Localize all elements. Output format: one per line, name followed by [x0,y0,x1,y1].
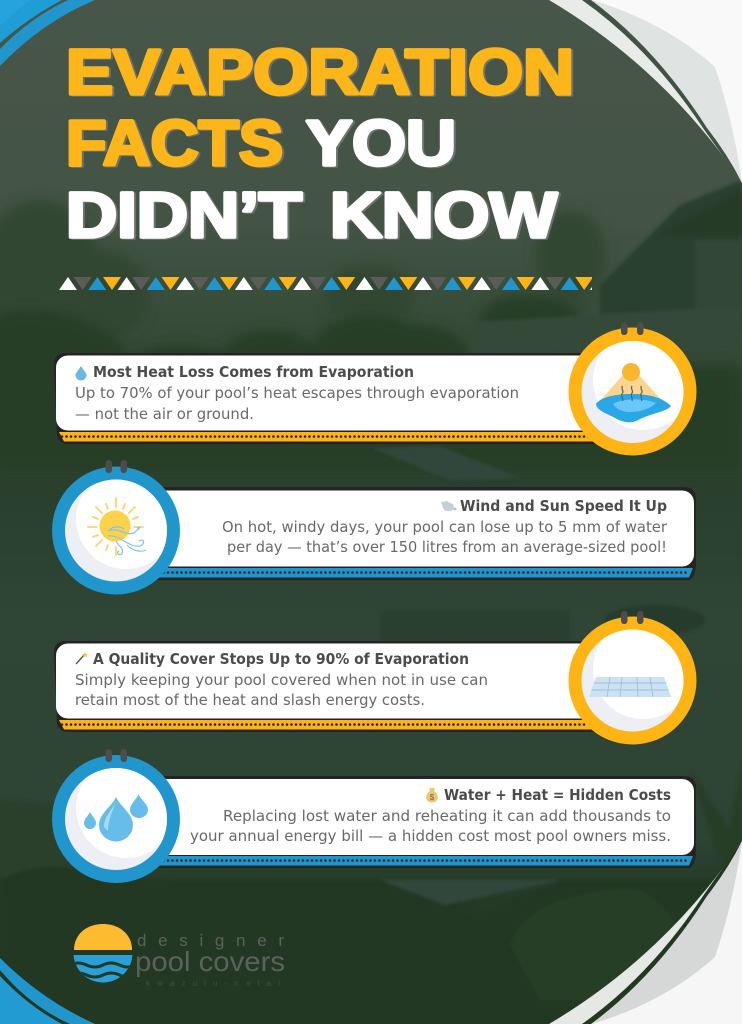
card base and dotted strip [130,776,696,868]
heading: A Quality Cover Stops Up to 90% of Evaporation [93,650,469,668]
body text: On hot, windy days, your pool can lose up to 5 mm of water [222,518,668,536]
corner decoration: top left [0,0,95,66]
panel: wind and sun [52,460,696,594]
logo wordmark: pool covers [135,946,285,977]
body text: Replacing lost water and reheating it can add thousands to [223,807,671,825]
icon badge: water drops [52,749,180,883]
card base and dotted strip [130,487,696,580]
title line: Didn't: DIDN’T [66,179,302,251]
title line: Know: KNOW [330,179,558,251]
logo mark: sun and waves [74,924,132,982]
icon badge: sun and wind [52,460,180,594]
body text: Up to 70% of your pool’s heat escapes through evaporation [75,384,519,402]
body text: Simply keeping your pool covered when not in use can [75,671,488,689]
icon: money bag [426,788,438,802]
card base and dotted strip [54,353,636,444]
body text: — not the air or ground. [75,405,254,423]
title [66,36,574,251]
body text [190,807,671,845]
triangle divider [59,277,608,290]
corner decoration: bottom left [0,958,95,1024]
icon: water drop [76,366,86,381]
heading: Wind and Sun Speed It Up [460,497,667,515]
card base and dotted strip [54,641,636,732]
panel: quality cover [54,611,696,744]
icon: money bag: $ [430,793,435,802]
icon: magic wand [76,652,88,664]
icon: wind puff [441,501,456,511]
corner decoration: top right [549,0,742,183]
heading: Most Heat Loss Comes from Evaporation [93,363,414,381]
body text: per day — that’s over 150 litres from an average-sized pool! [227,538,667,556]
body text: retain most of the heat and slash energy costs. [75,691,425,709]
panel: hidden costs [52,749,696,883]
title line: Facts: FACTS [66,107,283,179]
house roof and wall [472,180,742,352]
logo wordmark: kwazulu-natal [146,979,280,988]
logo wordmark: designer [137,931,284,950]
body text [222,518,668,556]
panel: most heat loss [54,322,696,456]
body text [75,384,519,423]
icon badge: pool cover [568,611,696,744]
title line: Evaporation: EVAPORATION [66,36,574,108]
logo [70,924,285,988]
heading: Water + Heat = Hidden Costs [444,786,671,804]
title line: You: YOU [306,107,456,179]
terrace and furniture [0,446,742,1024]
icon badge: sun over pool [568,322,696,456]
body text [75,671,488,709]
body text: your annual energy bill — a hidden cost most pool owners miss. [190,827,671,845]
logo wordmark [135,931,285,988]
corner decoration: bottom right [549,841,742,1024]
